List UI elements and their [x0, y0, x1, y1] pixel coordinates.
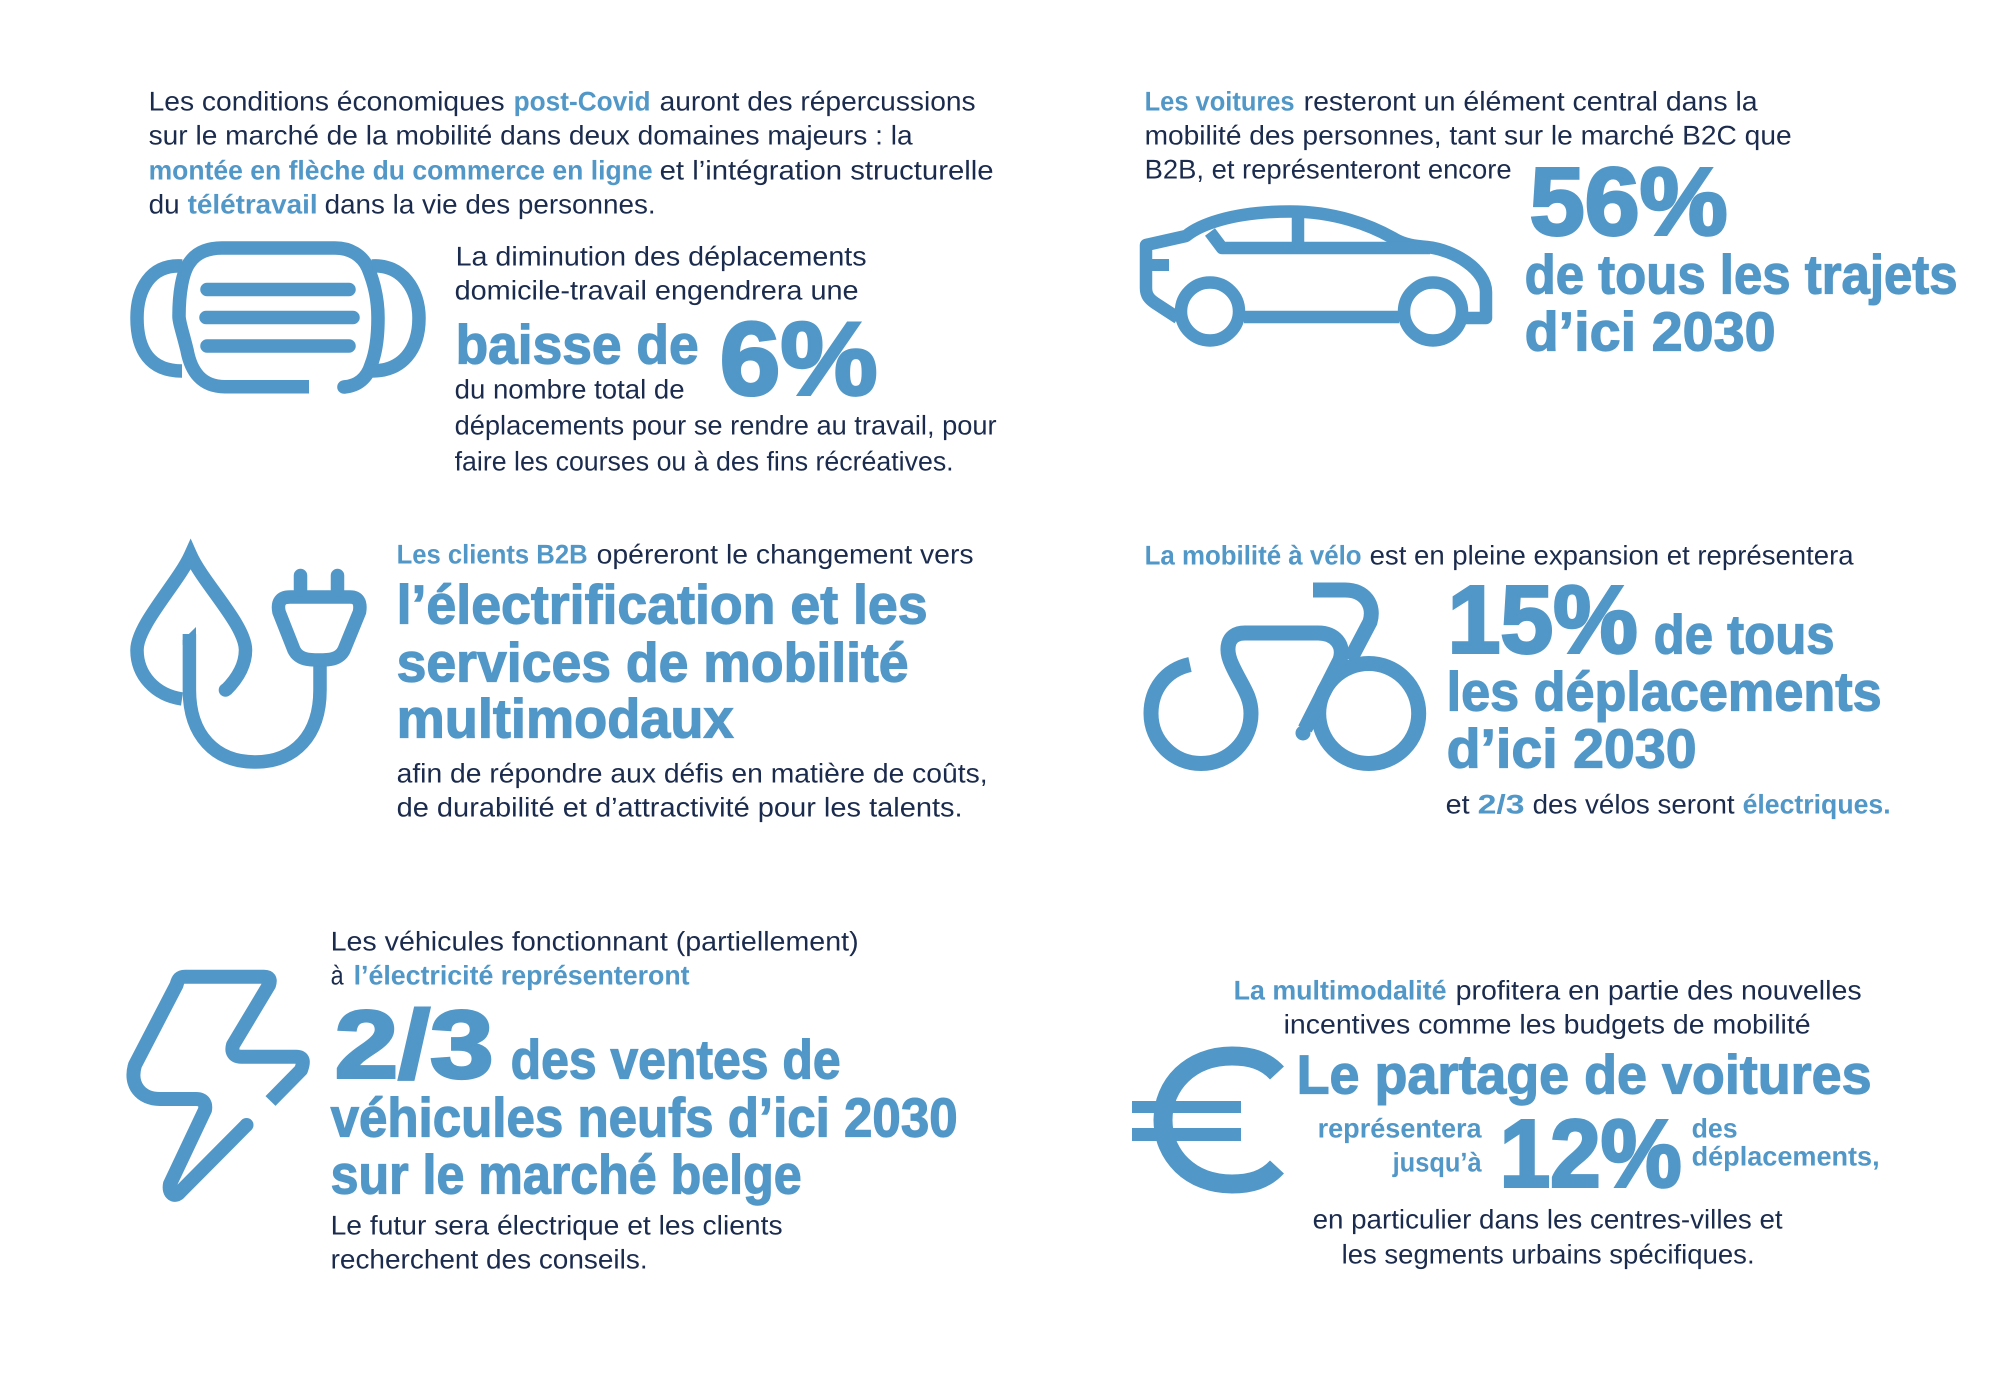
- text: B2B electrification and multimodal services: [397, 540, 988, 822]
- statistic: car sharing 12%: jusqu’à: [1392, 1148, 1483, 1178]
- text: the future is electric: Le futur sera électrique et les clients: [331, 1210, 783, 1240]
- text: B2B electrification and multimodal services: opéreront le changement vers: [597, 540, 974, 570]
- statistic: 56% of trips: de tous les trajets: [1525, 244, 1958, 306]
- statistic: 15% of trips: d’ici 2030: [1447, 718, 1697, 780]
- text: B2B electrification and multimodal services: multimodaux: [397, 688, 734, 750]
- text: 6% decrease in commuting: du nombre total de: [455, 374, 685, 404]
- text: 6% decrease in commuting: domicile-travail engendrera une: [455, 276, 859, 306]
- statistic: car sharing 12%: représentera: [1318, 1114, 1483, 1144]
- statistic: car sharing 12%: [1297, 1044, 1880, 1208]
- panel: cars: [1145, 86, 1958, 362]
- statistic: car sharing 12%: des: [1692, 1114, 1738, 1144]
- intro paragraph: et l’intégration structurelle: [660, 156, 994, 186]
- text: two thirds electric bikes: des vélos seront: [1533, 790, 1735, 820]
- statistic: 56% of trips: d’ici 2030: [1525, 300, 1776, 362]
- icon: car: [1146, 212, 1486, 340]
- panel: electric vehicles: [133, 926, 958, 1274]
- text: B2B electrification and multimodal services: Les clients B2B: [397, 540, 588, 570]
- statistic: 15% of trips: de tous: [1654, 604, 1835, 666]
- text: 6% decrease in commuting: baisse de: [456, 314, 699, 376]
- icon: lightning bolt: [133, 977, 303, 1195]
- statistic: 56% of trips: 56%: [1530, 148, 1728, 256]
- icon: euro sign: [1132, 1056, 1277, 1184]
- text: cycling intro: est en pleine expansion et représentera: [1370, 540, 1855, 570]
- text: 6% decrease in commuting: 6%: [720, 302, 878, 418]
- statistic: 56% of trips: [1525, 148, 1958, 362]
- text: multimodality intro: [1234, 976, 1862, 1040]
- text: city centres and urban segments: en particulier dans les centres-villes et: [1313, 1204, 1783, 1234]
- text: two thirds electric bikes: électriques.: [1743, 790, 1891, 820]
- statistic: 2/3 of new vehicle sales: sur le marché belge: [331, 1144, 802, 1206]
- text: EV intro: Les véhicules fonctionnant (partiellement): [331, 926, 859, 956]
- statistic: 2/3 of new vehicle sales: des ventes de: [511, 1028, 841, 1090]
- panel: multimodality: [1132, 976, 1880, 1270]
- statistic: 2/3 of new vehicle sales: [331, 992, 958, 1206]
- statistic: car sharing 12%: déplacements,: [1692, 1142, 1880, 1172]
- text: B2B electrification and multimodal services: afin de répondre aux défis en matière de coûts,: [397, 758, 988, 788]
- panel: cycling: [1145, 540, 1891, 820]
- text: B2B electrification and multimodal services: de durabilité et d’attractivité pour les talents.: [397, 792, 963, 822]
- text: city centres and urban segments: les segments urbains spécifiques.: [1342, 1240, 1755, 1270]
- text: cycling intro: La mobilité à vélo: [1145, 540, 1362, 570]
- text: two thirds electric bikes: et: [1446, 790, 1470, 820]
- text: city centres and urban segments: [1313, 1204, 1783, 1270]
- text: multimodality intro: profitera en partie des nouvelles: [1456, 976, 1862, 1006]
- intro paragraph: auront des répercussions: [660, 86, 976, 116]
- text: EV intro: à: [331, 960, 344, 990]
- intro paragraph: télétravail: [188, 190, 318, 220]
- statistic: 15% of trips: les déplacements: [1447, 660, 1882, 722]
- text: EV intro: [331, 926, 859, 990]
- intro paragraph: post-Covid: [514, 86, 651, 116]
- text: B2B electrification and multimodal services: l’électrification et les: [397, 574, 928, 636]
- intro paragraph: du: [149, 190, 180, 220]
- text: EV intro: l’électricité représenteront: [354, 960, 690, 990]
- intro paragraph: Les conditions économiques: [149, 86, 505, 116]
- intro paragraph: sur le marché de la mobilité dans deux domaines majeurs : la: [149, 120, 914, 150]
- text: multimodality intro: La multimodalité: [1234, 976, 1447, 1006]
- panel: post-Covid and remote work: [137, 86, 997, 476]
- panel: electrification: [137, 540, 988, 822]
- intro paragraph: dans la vie des personnes.: [325, 190, 656, 220]
- text: cars remain central: B2B, et représenteront encore: [1145, 154, 1512, 184]
- text: B2B electrification and multimodal services: services de mobilité: [397, 632, 909, 694]
- text: 6% decrease in commuting: [455, 242, 997, 476]
- text: the future is electric: recherchent des conseils.: [331, 1244, 648, 1274]
- text: the future is electric: [331, 1210, 783, 1274]
- text: two thirds electric bikes: [1446, 790, 1891, 820]
- text: cars remain central: mobilité des personnes, tant sur le marché B2C que: [1145, 120, 1792, 150]
- icon: bicycle: [1151, 590, 1419, 764]
- text: cycling intro: [1145, 540, 1855, 570]
- text: 6% decrease in commuting: faire les courses ou à des fins récréatives.: [455, 446, 954, 476]
- text: 6% decrease in commuting: La diminution des déplacements: [456, 242, 867, 272]
- statistic: 15% of trips: [1447, 566, 1882, 780]
- text: cars remain central: resteront un élément central dans la: [1304, 86, 1759, 116]
- statistic: 15% of trips: 15%: [1448, 566, 1638, 674]
- text: cars remain central: [1145, 86, 1792, 184]
- intro paragraph: [149, 86, 994, 220]
- icon: leaf and plug: [137, 555, 360, 762]
- text: 6% decrease in commuting: déplacements pour se rendre au travail, pour: [455, 410, 997, 440]
- statistic: car sharing 12%: Le partage de voitures: [1297, 1044, 1872, 1106]
- text: multimodality intro: incentives comme les budgets de mobilité: [1284, 1010, 1811, 1040]
- statistic: 2/3 of new vehicle sales: véhicules neufs d’ici 2030: [331, 1086, 958, 1148]
- text: two thirds electric bikes: 2/3: [1478, 790, 1525, 820]
- icon: face mask: [137, 248, 419, 394]
- statistic: 2/3 of new vehicle sales: 2/3: [335, 992, 494, 1098]
- intro paragraph: montée en flèche du commerce en ligne: [149, 156, 653, 186]
- text: cars remain central: Les voitures: [1145, 86, 1295, 116]
- statistic: car sharing 12%: 12%: [1500, 1100, 1682, 1208]
